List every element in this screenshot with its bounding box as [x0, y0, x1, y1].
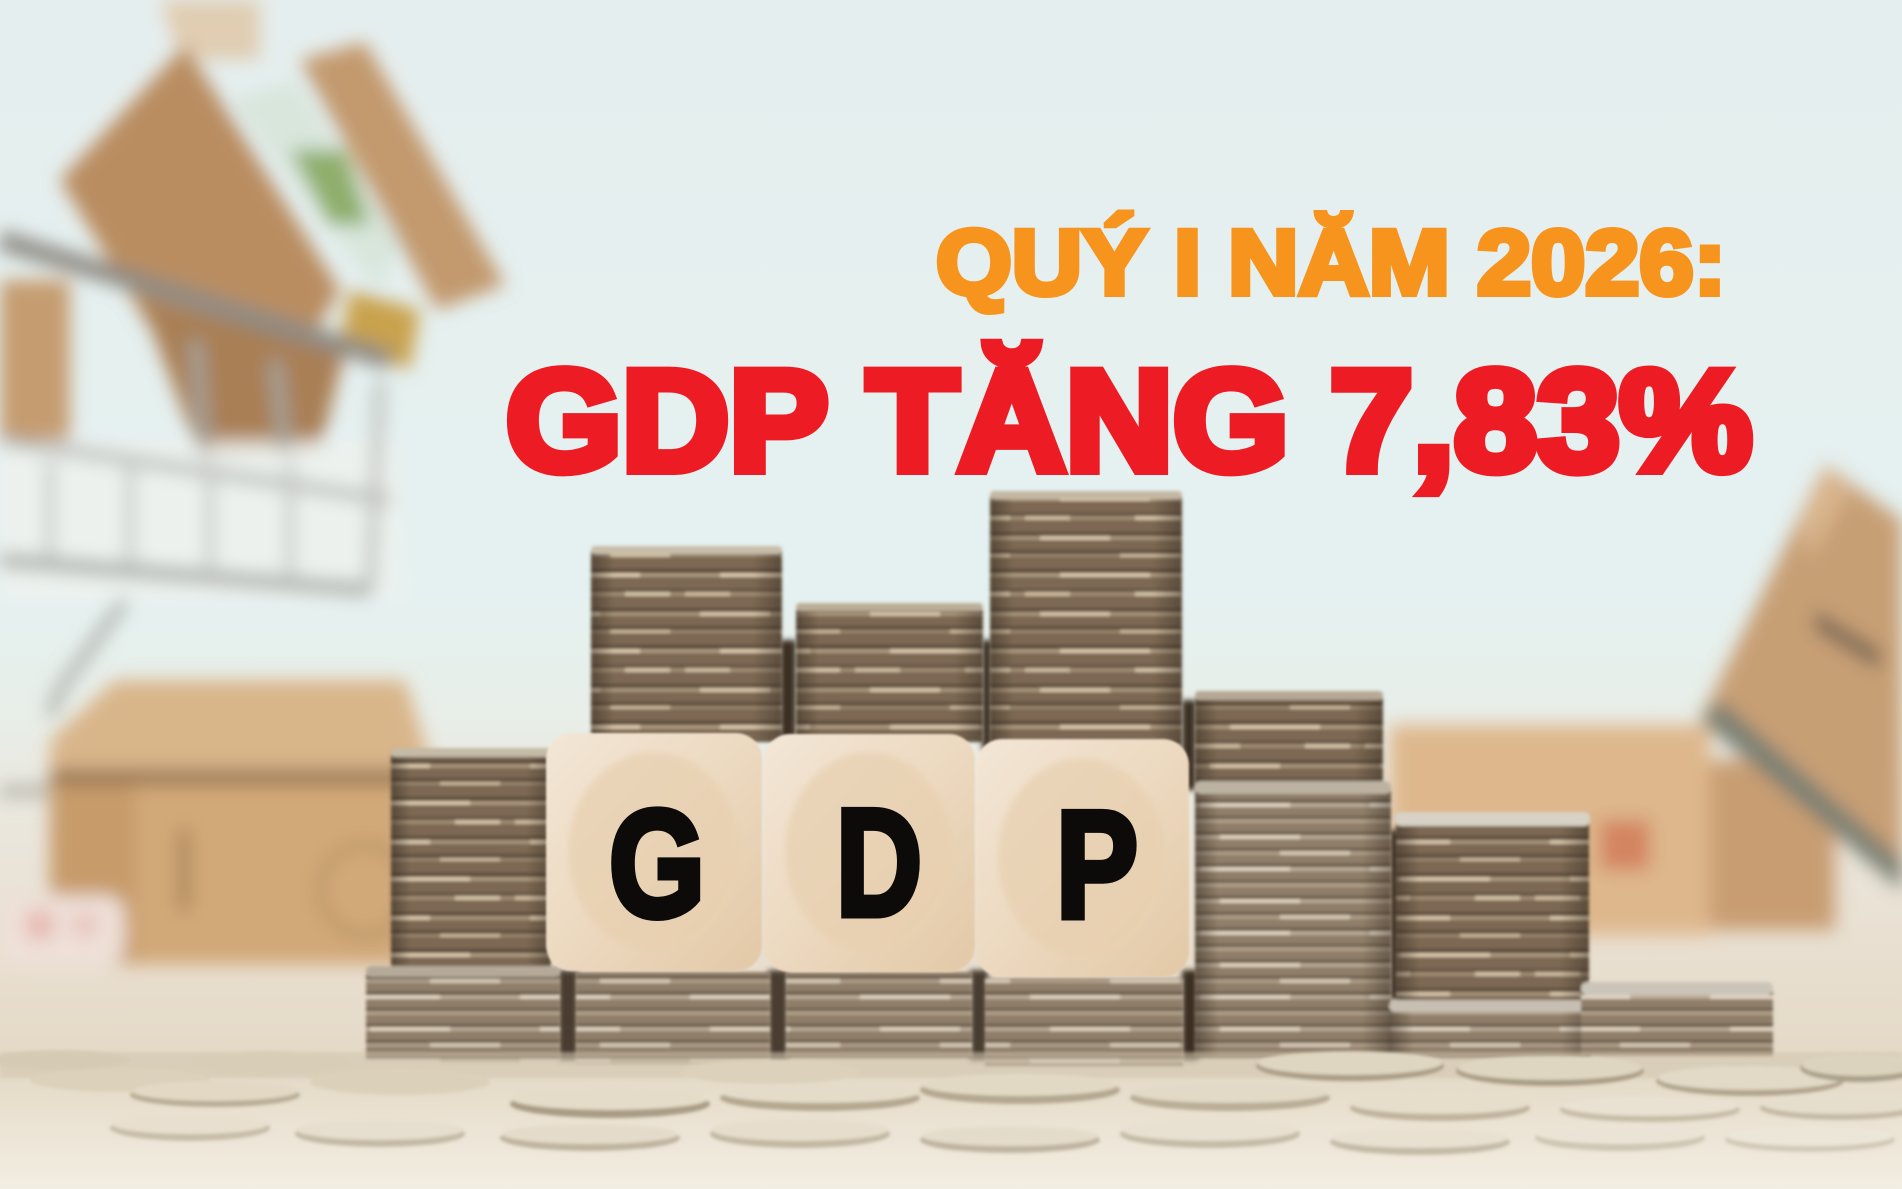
stack: low right [1389, 1000, 1591, 1058]
stack: bottom 3 [786, 972, 972, 1058]
stack: bottom 1 [366, 966, 560, 1062]
blurred shopping cart with house box [0, 0, 505, 797]
wooden block G [546, 733, 762, 971]
stack: right of blocks [1195, 781, 1391, 1058]
stack: right [1395, 812, 1590, 1000]
loose coins on the table [0, 1050, 1902, 1155]
stack: upper left [591, 546, 782, 742]
wooden block D [764, 734, 975, 972]
shadow behind coin stacks [558, 640, 1400, 1060]
stack: tallest [990, 491, 1182, 755]
coin stacks behind the blocks [366, 491, 1773, 1066]
stack: far left [391, 748, 551, 970]
stack: bottom 2 [576, 972, 770, 1064]
heading: quarter: QUÝ I NĂM 2026: [936, 211, 1726, 314]
stack: bottom 4 [985, 978, 1183, 1066]
blurred cardboard boxes, right [1390, 465, 1902, 935]
wooden block P [976, 739, 1189, 977]
letter D: D [836, 778, 922, 948]
stack: far right [1581, 982, 1773, 1056]
heading: GDP growth: GDP TĂNG 7,83% [506, 342, 1752, 501]
blurred cardboard box, left [0, 680, 430, 965]
letter P: P [1056, 780, 1138, 950]
letter G: G [609, 779, 705, 949]
stack: upper centre [796, 603, 983, 742]
stack: upper right [1195, 691, 1383, 788]
